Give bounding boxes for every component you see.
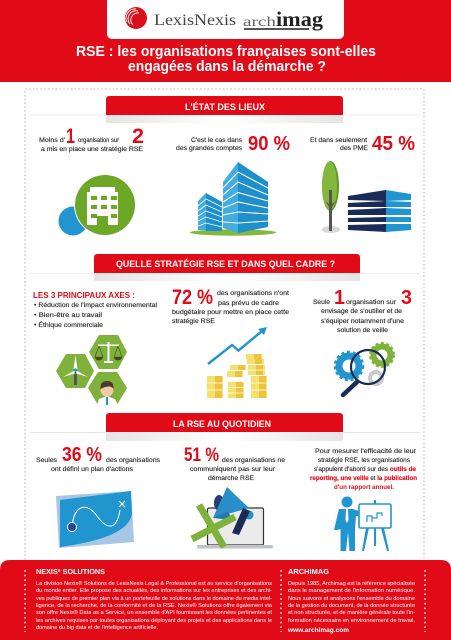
text: mesurer l'efficacité: Pour mesurer l'efficacité de leur: [315, 448, 417, 455]
footer: archimag: Depuis 1985, Archimag est la référence spécialisée: [288, 581, 415, 587]
text: les 3 principaux axes: [33, 291, 157, 329]
text: les 3 principaux axes: • Éthique commerciale: [34, 320, 103, 329]
stat: 36 %: [36, 444, 160, 473]
stat: 1 organisation sur 3: organisation sur: [346, 299, 397, 306]
stat: 1 organisation sur 2: organisation sur: [78, 137, 120, 144]
stat: 72 %: 72 %: [172, 286, 213, 309]
stat: 1 organisation sur 3: 3: [401, 287, 412, 309]
stat: 1 organisation sur 3: 1: [334, 287, 345, 309]
icon: megaphone laptop crossed out: [192, 487, 273, 548]
stat: 51 %: [184, 445, 285, 482]
icon: presenter with chart board: [334, 496, 391, 551]
stat: 51 %: des organisations ne: [222, 457, 285, 464]
icon: blue towers: [190, 162, 276, 236]
stat: 1 organisation sur 3: [313, 287, 412, 334]
section banner: quelle stratégie: QUELLE STRATÉGIE RSE ET DANS QUEL CADRE ?: [116, 259, 335, 269]
footer: archimag: de la gestion du document, de la donnée structurée: [288, 603, 415, 609]
text: les 3 principaux axes: LES 3 PRINCIPAUX AXES :: [33, 291, 135, 300]
stat: 36 %: des organisations: [106, 457, 160, 464]
stat: 45 %: Et dans seulement: [310, 137, 367, 144]
text: les 3 principaux axes: • Réduction de l'impact environnemental: [34, 302, 157, 309]
footer: nexis solutions: son offre Nexis® Data as a Service, un ensemble d'API fournissant les données pertinentes et: [36, 609, 272, 616]
stat: 36 %: ont défini un plan d'actions: [51, 466, 133, 473]
footer: nexis solutions: La division Nexis® Solutions de LexisNexis Legal & Professional est au service d'organisations: [36, 580, 272, 587]
section banner: quelle stratégie: [30, 254, 420, 281]
icon: route map: [56, 491, 134, 548]
logo panel: imag: [276, 7, 324, 31]
footer: archimag: [287, 569, 415, 634]
stat: 90 %: C'est le cas dans: [191, 137, 242, 144]
footer: nexis solutions: domaine du big data et de l'intelligence artificielle.: [36, 625, 158, 631]
logo panel: arch: [243, 15, 276, 30]
stat: 1 organisation sur 3: envisage de s'outiller et de: [321, 308, 402, 315]
footer: nexis solutions: NEXIS* SOLUTIONS: [36, 569, 105, 576]
stat: 1 organisation sur 2: [39, 125, 144, 153]
icon: rising arrow and coins: [207, 327, 267, 398]
footer: [0, 560, 451, 640]
icon: gears and magnifier: [335, 343, 394, 395]
footer: nexis solutions: les archives requises par toutes organisations déployant des projets et des applications dans le: [36, 618, 272, 624]
title: RSE : les organisations françaises sont-elles: [76, 43, 376, 60]
text: mesurer l'efficacité: reporting, une veille et la publication: [310, 475, 417, 482]
stat: 1 organisation sur 3: solution de veille: [337, 327, 388, 334]
footer: nexis solutions: ligence, de la recherche, de la conformité et de la RSE. Nexis® Solutions offre également via: [36, 602, 273, 609]
header band: [0, 0, 451, 82]
text: mesurer l'efficacité: [310, 448, 417, 491]
section banner: la rse au quotidien: LA RSE AU QUOTIDIEN: [173, 419, 271, 429]
stat: 1 organisation sur 2: 2: [132, 125, 144, 148]
icon: green office circle: [58, 174, 136, 236]
section banner: la rse au quotidien: [30, 413, 420, 441]
footer: archimag: ARCHIMAG: [288, 569, 330, 576]
stat: 1 organisation sur 2: 1: [66, 125, 75, 148]
stat: 72 %: pas prévu de cadre: [218, 300, 279, 307]
stat: 72 %: budgétaire pour mettre en place cette: [172, 309, 289, 316]
icon: three hexagons: [56, 335, 127, 405]
stat: 51 %: 51 %: [184, 445, 219, 466]
text: les 3 principaux axes: • Bien-être au travail: [34, 312, 102, 319]
stat: 45 %: [310, 133, 415, 155]
stat: 36 %: Seules: [36, 457, 57, 464]
stat: 72 %: [172, 286, 289, 325]
text: mesurer l'efficacité: d'un rapport annuel.: [334, 484, 394, 491]
footer: archimag: Nous suivons et analysons l'ensemble du domaine: [288, 596, 415, 602]
stat: 45 %: 45 %: [372, 133, 415, 155]
text: mesurer l'efficacité: stratégie RSE, les organisations: [318, 457, 410, 464]
section banner: l'état des lieux: L'ÉTAT DES LIEUX: [185, 102, 265, 112]
dotted frame: [25, 89, 424, 560]
logo panel: LexisNexis: [154, 12, 236, 29]
footer: nexis solutions: du monde entier. Elle propose des actualités, des informations sur les entreprises et des archi-: [36, 588, 272, 594]
icon: tree and low building: [322, 161, 411, 233]
stat: 1 organisation sur 2: a mis en place une stratégie RSE: [41, 146, 143, 153]
text: mesurer l'efficacité: s'appuient d'abord sur des outils de: [314, 466, 416, 473]
footer: archimag: dans le management de l'information numérique.: [288, 588, 415, 594]
footer dots: [25, 570, 425, 632]
stat: 72 %: stratégie RSE: [172, 318, 215, 325]
stat: 51 %: démarche RSE: [208, 475, 254, 482]
logo panel: [107, 0, 344, 39]
footer: archimag: formation nécessaire en environnement de travail.: [288, 618, 415, 624]
stat: 90 %: des grandes comptes: [176, 145, 242, 152]
stat: 45 %: des PME: [340, 145, 368, 152]
footer: archimag: www.archimag.com: [287, 628, 349, 634]
stat: 36 %: 36 %: [62, 444, 102, 466]
stat: 1 organisation sur 2: Moins d': [39, 137, 65, 144]
stat: 72 %: des organisations n'ont: [217, 290, 289, 297]
footer: archimag: et non structurée, et de manière générale toute l'in-: [288, 610, 415, 616]
footer: nexis solutions: [36, 569, 273, 631]
title: [76, 43, 376, 75]
section banner: l'état des lieux: [30, 96, 420, 123]
footer: nexis solutions: ves publiques de premier plan via à un portefeuille de solutions dans le domaine du media intel-: [36, 596, 272, 602]
stat: 1 organisation sur 3: Seule: [313, 299, 330, 306]
title: engagées dans la démarche ?: [128, 58, 326, 75]
stat: 1 organisation sur 3: s'équiper notamment d'une: [321, 318, 404, 325]
stat: 90 %: 90 %: [248, 133, 290, 155]
stat: 90 %: [176, 133, 290, 155]
stat: 51 %: communiquent pas sur leur: [190, 466, 276, 473]
